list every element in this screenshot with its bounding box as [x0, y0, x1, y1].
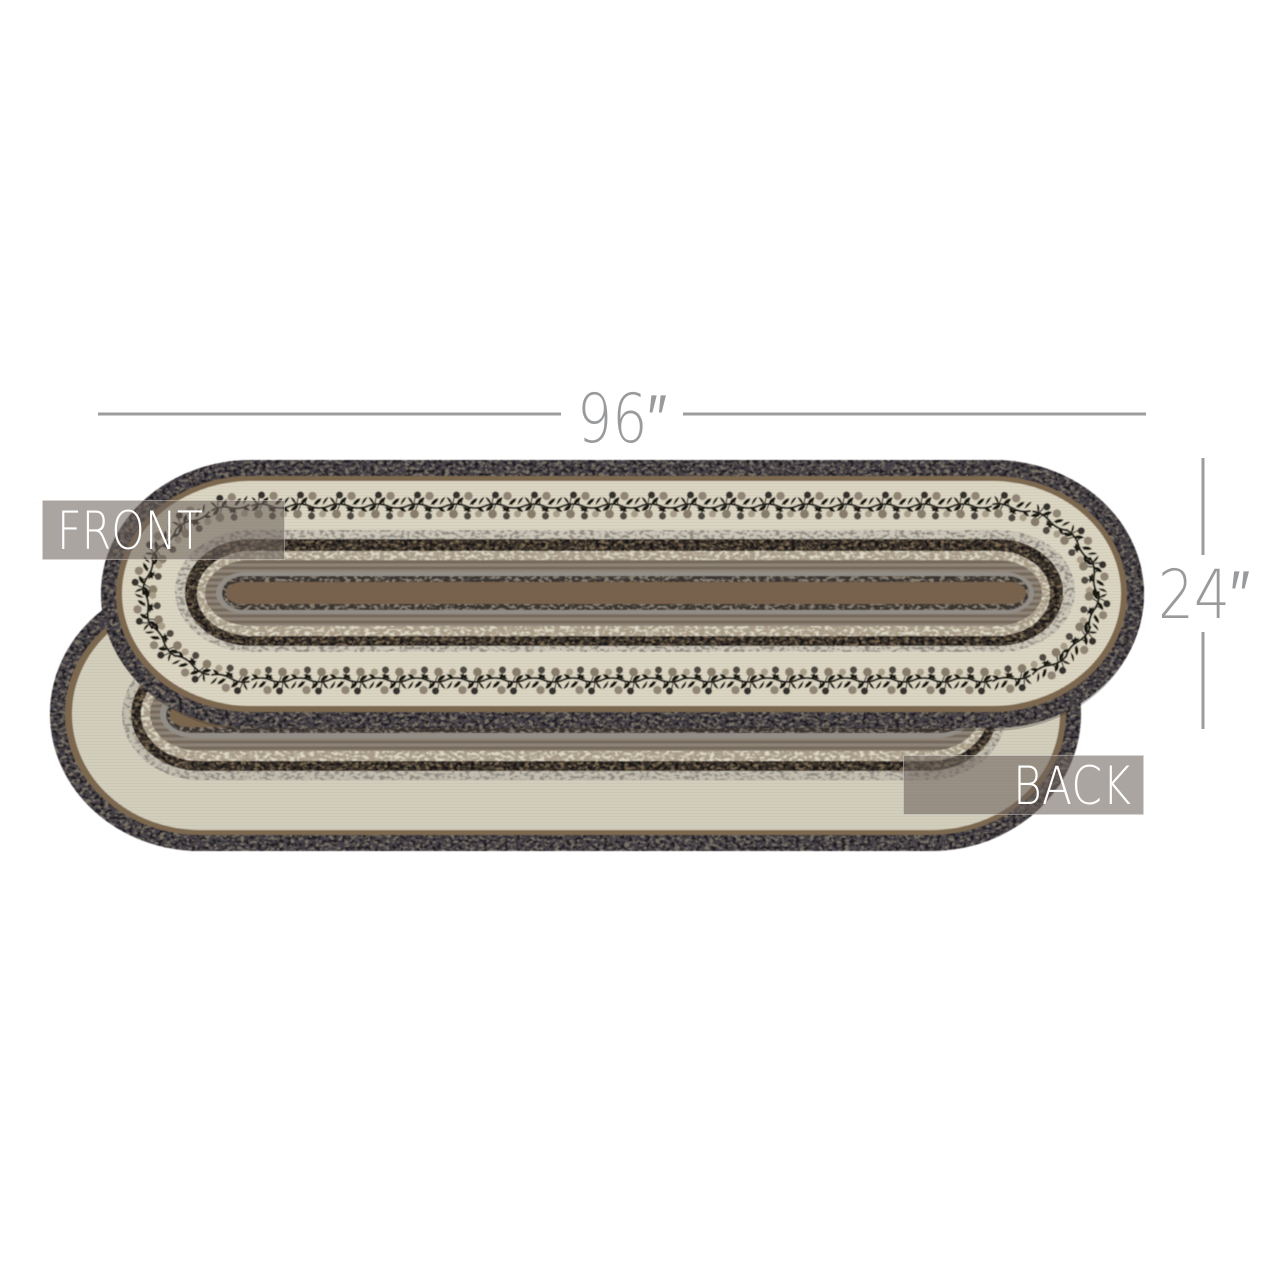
front rug — [101, 460, 1144, 728]
vine right end — [990, 490, 1113, 696]
height dimension: 24 inches: 24″ — [1158, 556, 1250, 635]
back rug outer dark braid — [50, 577, 1081, 851]
back rug cream field — [72, 598, 1060, 830]
width dimension: 96 inches — [98, 380, 1146, 459]
back rug centre stripes — [122, 648, 1006, 780]
front rug centre stripes — [175, 530, 1075, 652]
back rug — [50, 577, 1081, 851]
front rug outer dark braid — [101, 460, 1144, 728]
label: back — [904, 756, 1144, 817]
shadow of front rug — [103, 463, 1143, 731]
label: back: BACK — [1013, 756, 1131, 817]
front rug cream field — [122, 481, 1121, 706]
height dimension: 24 inches — [1158, 458, 1250, 729]
vine top row — [251, 488, 992, 522]
floral vine border — [129, 488, 1113, 698]
width dimension: 96 inches: 96″ — [577, 380, 667, 459]
vine bottom row — [251, 664, 992, 698]
label: front: FRONT — [57, 501, 203, 562]
vine left end — [129, 490, 252, 696]
